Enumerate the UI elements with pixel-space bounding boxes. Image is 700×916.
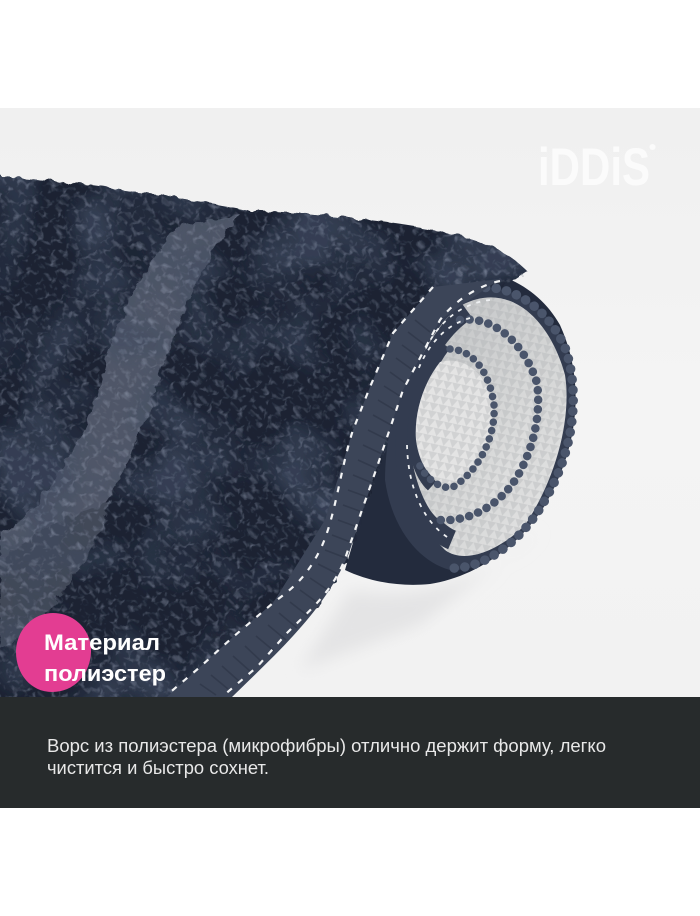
brand logo: iDDiS xyxy=(538,138,650,197)
dark description band xyxy=(0,697,700,808)
photo background xyxy=(0,108,700,697)
heading: material: Материал xyxy=(44,630,160,655)
roll: fold base xyxy=(385,288,574,570)
description text: Ворс из полиэстера (микрофибры) отлично держит форму, легко xyxy=(47,736,606,756)
heading: material: полиэстер xyxy=(44,661,166,686)
roll: middle backing ring xyxy=(410,319,538,520)
roll: dark underside and outline xyxy=(345,270,576,585)
heading: material xyxy=(44,630,166,686)
roll: outer backing ring xyxy=(400,287,573,568)
roll: folded band xyxy=(405,312,468,540)
pink circle badge xyxy=(16,613,91,692)
photo: rolled bath mat xyxy=(0,170,576,710)
roll: inner band xyxy=(414,345,445,486)
description text: чистится и быстро сохнет. xyxy=(47,758,269,778)
infographic page xyxy=(0,108,700,808)
floor shadow under the roll xyxy=(314,586,458,660)
front border band xyxy=(167,279,500,697)
mat pile body xyxy=(0,170,540,710)
roll: inner backing core xyxy=(416,349,494,487)
description text xyxy=(47,736,606,778)
lighter woven stripe xyxy=(0,214,240,559)
white stitching along the border xyxy=(167,281,500,696)
roll: inner spiral stitching xyxy=(407,300,490,540)
